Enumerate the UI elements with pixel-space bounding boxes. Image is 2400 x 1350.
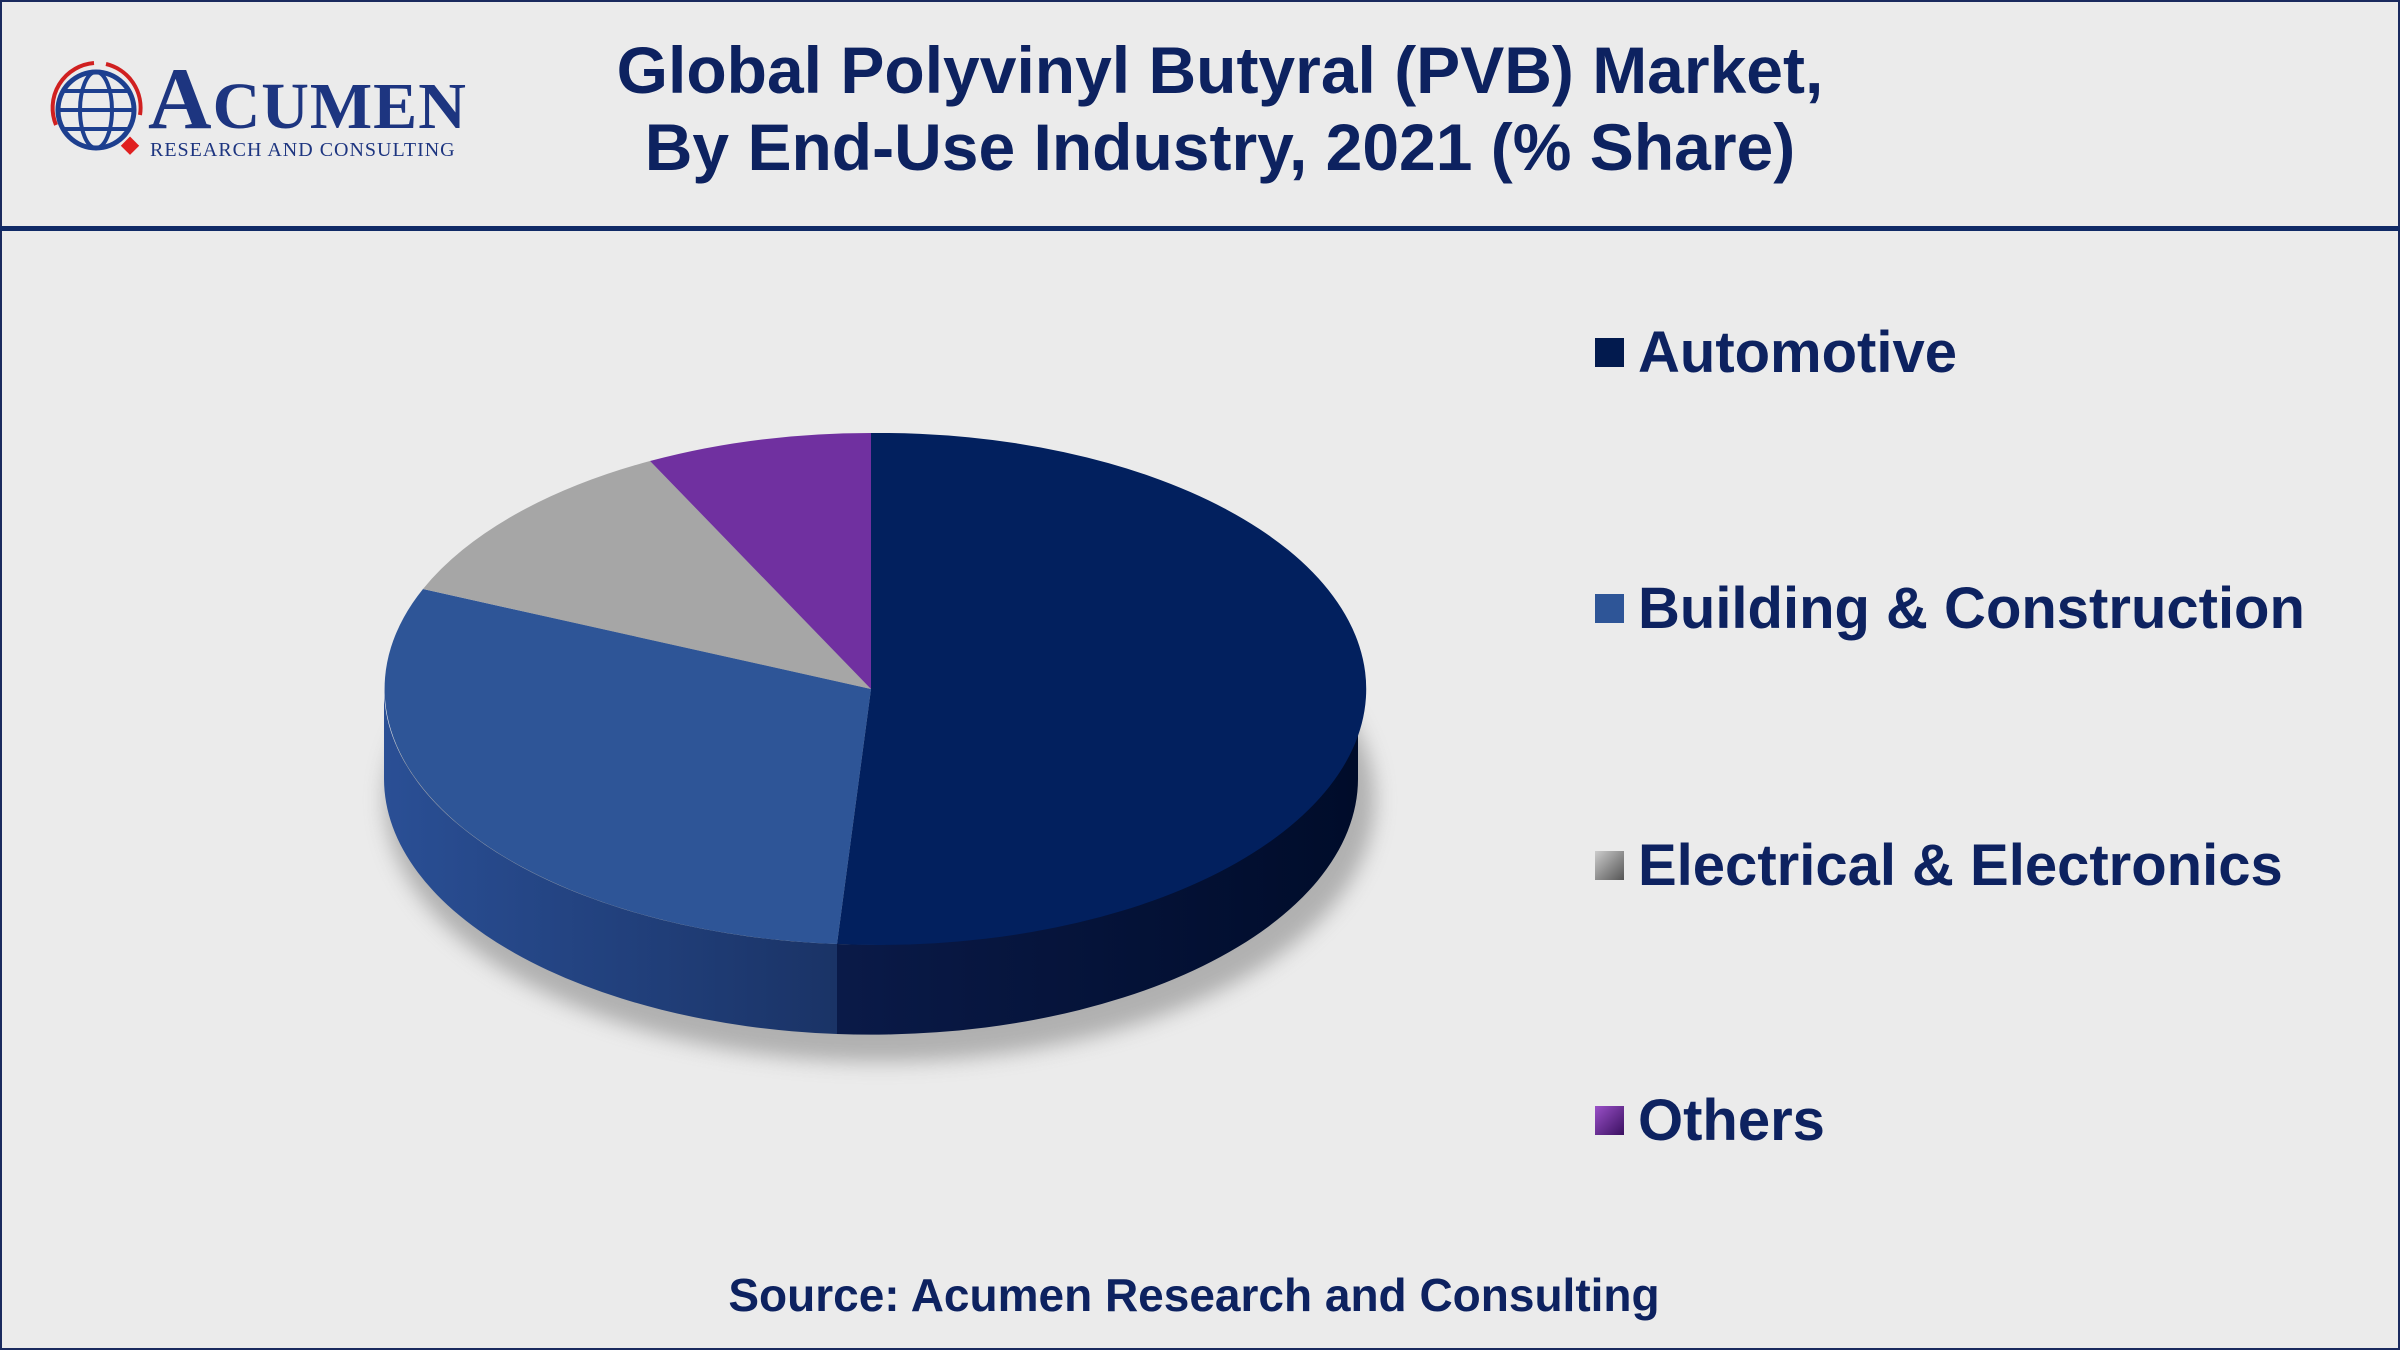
legend: electrical: Electrical & Electronics bbox=[1638, 832, 2283, 898]
logo text: ACUMEN bbox=[148, 51, 467, 148]
logo: RESEARCH AND CONSULTING bbox=[150, 139, 456, 161]
icon: globe bbox=[50, 61, 143, 155]
logo bbox=[50, 51, 467, 161]
side: automotive bbox=[837, 689, 1358, 1035]
legend: automotive: Automotive bbox=[1638, 320, 1957, 384]
title: Global Polyvinyl Butyral (PVB) Market, bbox=[617, 33, 1823, 107]
side: building bbox=[384, 689, 837, 1034]
slice: automotive bbox=[837, 433, 1366, 945]
slice: building bbox=[385, 589, 871, 944]
legend: building: Building & Construction bbox=[1638, 576, 2305, 640]
legend: others: Others bbox=[1638, 1088, 1825, 1152]
source: Source: Acumen Research and Consulting bbox=[728, 1269, 1660, 1321]
slice: others bbox=[650, 433, 871, 689]
title: By End-Use Industry, 2021 (% Share) bbox=[645, 110, 1795, 184]
slice: electrical bbox=[423, 461, 871, 689]
title bbox=[617, 33, 1823, 184]
